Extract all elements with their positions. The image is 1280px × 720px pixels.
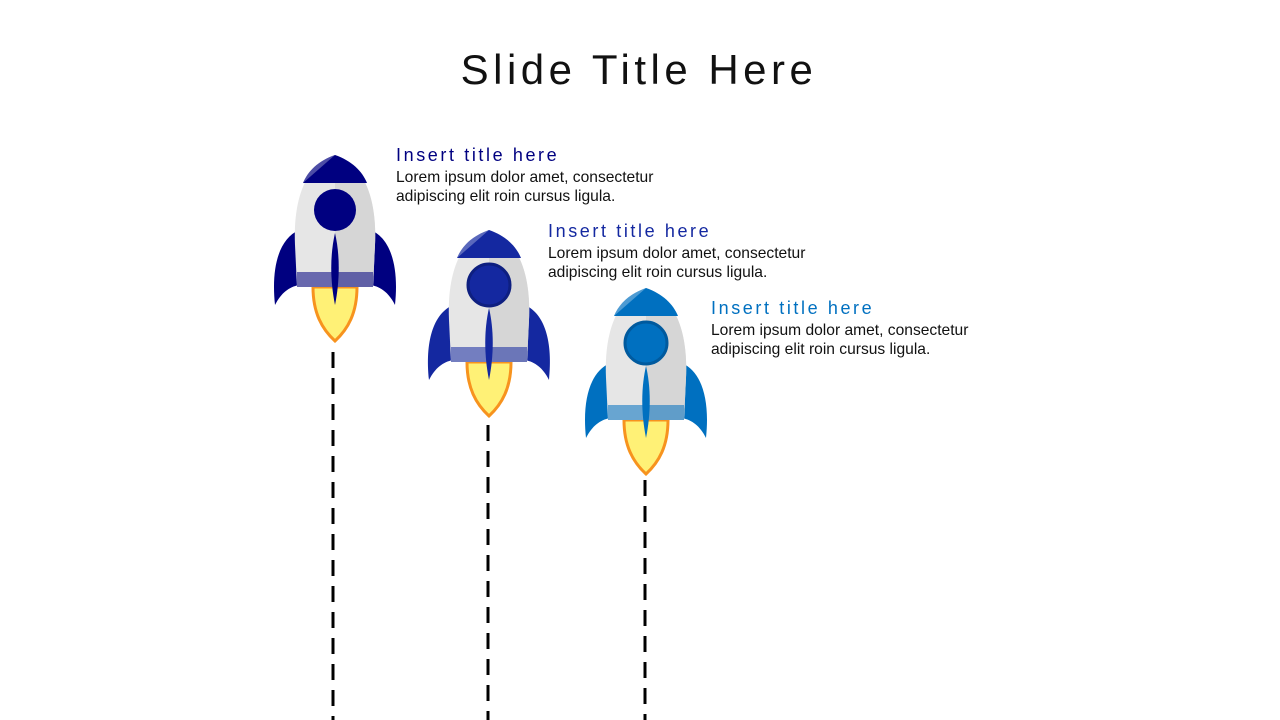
text block 2 <box>548 221 806 281</box>
body 1: adipiscing elit roin cursus ligula. <box>396 188 615 205</box>
heading 1: Insert title here <box>396 145 559 165</box>
body 1: Lorem ipsum dolor amet, consectetur <box>396 169 653 186</box>
body 3 <box>711 322 968 358</box>
body 2 <box>548 245 806 281</box>
heading 3: Insert title here <box>711 298 874 318</box>
heading 2: Insert title here <box>548 221 711 241</box>
rocket 2 <box>428 230 550 720</box>
dashed trail 1 <box>332 352 334 720</box>
body 3: adipiscing elit roin cursus ligula. <box>711 341 930 358</box>
body 2: Lorem ipsum dolor amet, consectetur <box>548 245 805 262</box>
text block 3 <box>711 298 968 358</box>
body 1 <box>396 169 654 205</box>
body 2: adipiscing elit roin cursus ligula. <box>548 264 767 281</box>
dashed trail 3 <box>644 480 646 720</box>
body 3: Lorem ipsum dolor amet, consectetur <box>711 322 968 339</box>
text block 1 <box>396 145 654 205</box>
rocket 3 <box>585 288 707 720</box>
dashed trail 2 <box>486 425 490 720</box>
title: Slide Title Here <box>461 46 817 93</box>
rocket 1 <box>274 155 396 720</box>
